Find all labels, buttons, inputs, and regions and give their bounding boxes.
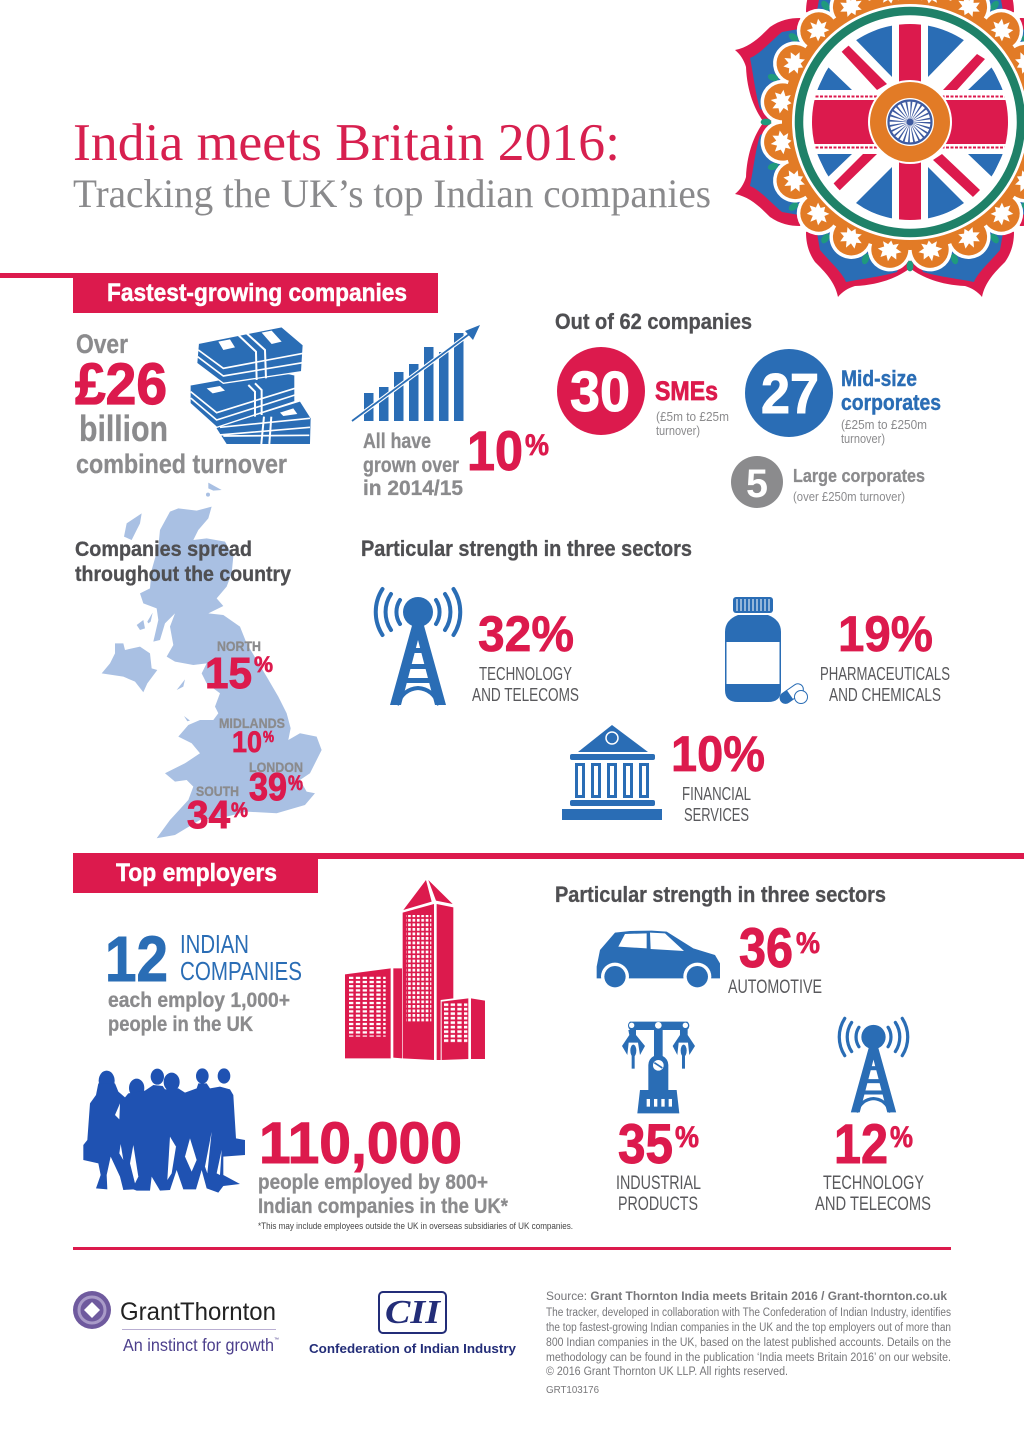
stat: 110,000 people employed: 110,000 — [259, 1111, 462, 1176]
subtitle: Tracking the UK’s top Indian companies — [73, 171, 711, 216]
stat: 12% technology and telecoms: AND TELECOMS — [815, 1194, 931, 1215]
heading banner: top employers — [73, 853, 1024, 893]
map label: london 39%: % — [288, 772, 303, 795]
source and methodology text: 800 Indian companies in the UK, based on the latest published accounts. Details on the — [546, 1337, 951, 1349]
mandala scalloped orange ring — [757, 0, 1024, 275]
stat: all have grown over 10% — [363, 419, 549, 500]
stat: 30 SMEs: turnover) — [656, 424, 700, 438]
stat: 35% industrial products: INDUSTRIAL — [616, 1173, 701, 1194]
source and methodology text: Source: Grant Thornton India meets Britain 2016 / Grant-thornton.co.uk — [546, 1289, 947, 1303]
stat: 32% technology and telecoms — [472, 606, 579, 705]
stat: 27 mid-size corporates: 27 — [761, 362, 819, 426]
mandala Union Jack wheel — [811, 23, 1009, 221]
stat: 35% industrial products: 35 — [618, 1112, 673, 1175]
stat: 36% automotive: % — [796, 927, 820, 960]
map label: south 34%: SOUTH — [196, 783, 239, 799]
bar chart: growth — [352, 325, 480, 421]
logo: Confederation of Indian Industry: CII — [385, 1294, 442, 1331]
stat: 27 mid-size corporates — [745, 349, 941, 446]
logo: Grant Thornton: An instinct for growth — [123, 1335, 274, 1355]
heading: out of 62 companies: Out of 62 companies — [555, 309, 752, 334]
logo: Grant Thornton: GrantThornton — [120, 1298, 276, 1326]
heading banner: fastest-growing companies — [0, 273, 438, 313]
icon: pill bottle and capsules — [725, 597, 808, 706]
stat: 27 mid-size corporates: (£25m to £250m — [841, 418, 927, 432]
map label: south 34%: % — [231, 799, 248, 822]
stat: 32% technology and telecoms: AND TELECOMS — [472, 685, 579, 705]
logo: Confederation of Indian Industry — [309, 1292, 517, 1356]
source and methodology text: © 2016 Grant Thornton UK LLP. All rights reserved. — [546, 1366, 788, 1378]
heading banner: top employers: Top employers — [116, 859, 277, 887]
stat: 19% pharmaceuticals and chemicals: PHARMACEUTICALS — [820, 664, 950, 684]
stat: 36% automotive — [728, 916, 822, 998]
map label: midlands 10%: MIDLANDS — [219, 715, 285, 731]
stat: 5 large corporates: 5 — [746, 462, 768, 506]
stat: 30 SMEs: 30 — [570, 360, 630, 424]
stat: 10% financial services: SERVICES — [684, 805, 749, 825]
stat: 36% automotive: AUTOMOTIVE — [728, 977, 822, 998]
icon: stacks of banknotes — [190, 327, 311, 444]
icon: bank building — [562, 725, 662, 820]
stat: 35% industrial products: PRODUCTS — [618, 1194, 698, 1215]
title: India meets Britain 2016: — [73, 114, 620, 172]
stat: 27 mid-size corporates: turnover) — [841, 432, 885, 446]
stat: all have grown over 10%: 10 — [467, 419, 523, 482]
stat: 30 SMEs — [557, 347, 729, 438]
map label: london 39%: 39 — [249, 766, 287, 809]
source and methodology text — [546, 1289, 951, 1396]
icon: mandala emblem combining Union Jack and Ashoka chakra — [735, 0, 1024, 297]
logo: Grant Thornton: ™ — [274, 1337, 279, 1343]
icon: car — [580, 931, 733, 995]
stat: 12% technology and telecoms: 12 — [834, 1112, 888, 1175]
icon: group of employees silhouette — [83, 1068, 245, 1193]
stat: 5 large corporates — [731, 456, 925, 508]
map label: midlands 10%: 10 — [232, 726, 262, 759]
stat: 19% pharmaceuticals and chemicals: AND CHEMICALS — [829, 685, 941, 705]
map label: north 15%: NORTH — [217, 638, 261, 654]
heading: companies spread throughout the country — [75, 538, 291, 586]
map label: north 15%: 15 — [205, 649, 252, 698]
heading: companies spread throughout the country: Companies spread — [75, 538, 252, 561]
source and methodology text: the top fastest-growing Indian companies in the UK and the top employers out of more than — [546, 1322, 951, 1334]
heading: companies spread throughout the country: throughout the country — [75, 563, 291, 586]
stat: 5 large corporates: (over £250m turnover) — [793, 490, 905, 504]
stat: 12 Indian companies: each employ 1,000+ — [108, 989, 290, 1012]
heading: particular strength in three sectors: Particular strength in three sectors — [361, 536, 692, 561]
stat: 10% financial services: 10% — [671, 726, 765, 782]
logo: Grant Thornton — [73, 1291, 279, 1355]
stat: 35% industrial products: % — [675, 1121, 699, 1154]
stat: 35% industrial products — [616, 1112, 701, 1215]
stat: 19% pharmaceuticals and chemicals — [820, 606, 950, 705]
stat: 110,000 people employed — [258, 1111, 573, 1231]
stat: £26 billion combined turnover: Over — [76, 329, 128, 359]
map label: south 34%: 34 — [187, 794, 230, 837]
mandala green ring — [792, 4, 1024, 240]
stat: 12% technology and telecoms — [815, 1112, 931, 1215]
mandala petals — [735, 0, 1024, 297]
map label: south 34% — [187, 783, 248, 837]
stat: all have grown over 10%: All have — [363, 430, 431, 453]
map label: midlands 10%: % — [263, 729, 274, 746]
heading: particular strength in three sectors (employers): Particular strength in three sectors — [555, 882, 886, 907]
stat: 27 mid-size corporates: corporates — [841, 390, 941, 415]
stat: all have grown over 10%: grown over — [363, 454, 459, 477]
stat: 12 Indian companies — [105, 923, 302, 1036]
icon: industrial robot arm — [622, 1022, 695, 1113]
map label: north 15% — [205, 638, 273, 698]
stat: 110,000 people employed: *This may include employees outside the UK in overseas subsidiaries of UK companies. — [258, 1221, 573, 1231]
stat: 12% technology and telecoms: % — [890, 1121, 913, 1154]
stat: 12 Indian companies: COMPANIES — [180, 956, 302, 986]
logo: Confederation of Indian Industry: Confederation of Indian Industry — [309, 1341, 517, 1356]
stat: 19% pharmaceuticals and chemicals: 19% — [838, 606, 933, 662]
stat: 5 large corporates: Large corporates — [793, 466, 925, 486]
stat: £26 billion combined turnover: billion — [79, 408, 168, 449]
stat: 27 mid-size corporates: Mid-size — [841, 366, 917, 391]
source and methodology text: methodology can be found in the publication ‘India meets Britain 2016’ on our website. — [546, 1352, 951, 1364]
stat: 12% technology and telecoms: TECHNOLOGY — [823, 1173, 924, 1194]
stat: £26 billion combined turnover: combined turnover — [76, 449, 287, 479]
stat: £26 billion combined turnover: £26 — [75, 352, 167, 417]
stat: 36% automotive: 36 — [739, 916, 793, 979]
heading banner: fastest-growing companies: Fastest-growing companies — [107, 279, 407, 307]
stat: 30 SMEs: SMEs — [655, 376, 718, 406]
source and methodology text: GRT103176 — [546, 1384, 599, 1396]
map label: london 39%: LONDON — [249, 759, 303, 775]
stat: 110,000 people employed: Indian companies in the UK* — [258, 1195, 509, 1218]
icon: office buildings — [345, 880, 485, 1060]
stat: all have grown over 10%: in 2014/15 — [363, 477, 463, 500]
map label: north 15%: % — [254, 652, 273, 677]
stat: all have grown over 10%: % — [525, 429, 549, 462]
stat: 32% technology and telecoms: 32% — [478, 606, 574, 662]
source and methodology text: The tracker, developed in collaboration with The Confederation of Indian Industry, identifies — [546, 1307, 951, 1319]
map label: london 39% — [249, 759, 303, 809]
map: United Kingdom — [102, 483, 322, 838]
stat: 32% technology and telecoms: TECHNOLOGY — [479, 664, 572, 684]
stat: 12 Indian companies: INDIAN — [180, 929, 249, 959]
stat: £26 billion combined turnover — [75, 329, 287, 479]
icon: telecoms tower small — [839, 1018, 908, 1112]
stat: 10% financial services — [671, 726, 765, 825]
stat: 10% financial services: FINANCIAL — [682, 784, 751, 804]
mandala orange hub with chakra — [868, 80, 952, 164]
stat: 30 SMEs: (£5m to £25m — [656, 410, 729, 424]
stat: 12 Indian companies: people in the UK — [108, 1013, 253, 1036]
icon: telecoms tower — [376, 589, 460, 705]
map label: midlands 10% — [219, 715, 285, 759]
stat: 12 Indian companies: 12 — [105, 923, 168, 995]
stat: 110,000 people employed: people employed by 800+ — [258, 1171, 488, 1194]
